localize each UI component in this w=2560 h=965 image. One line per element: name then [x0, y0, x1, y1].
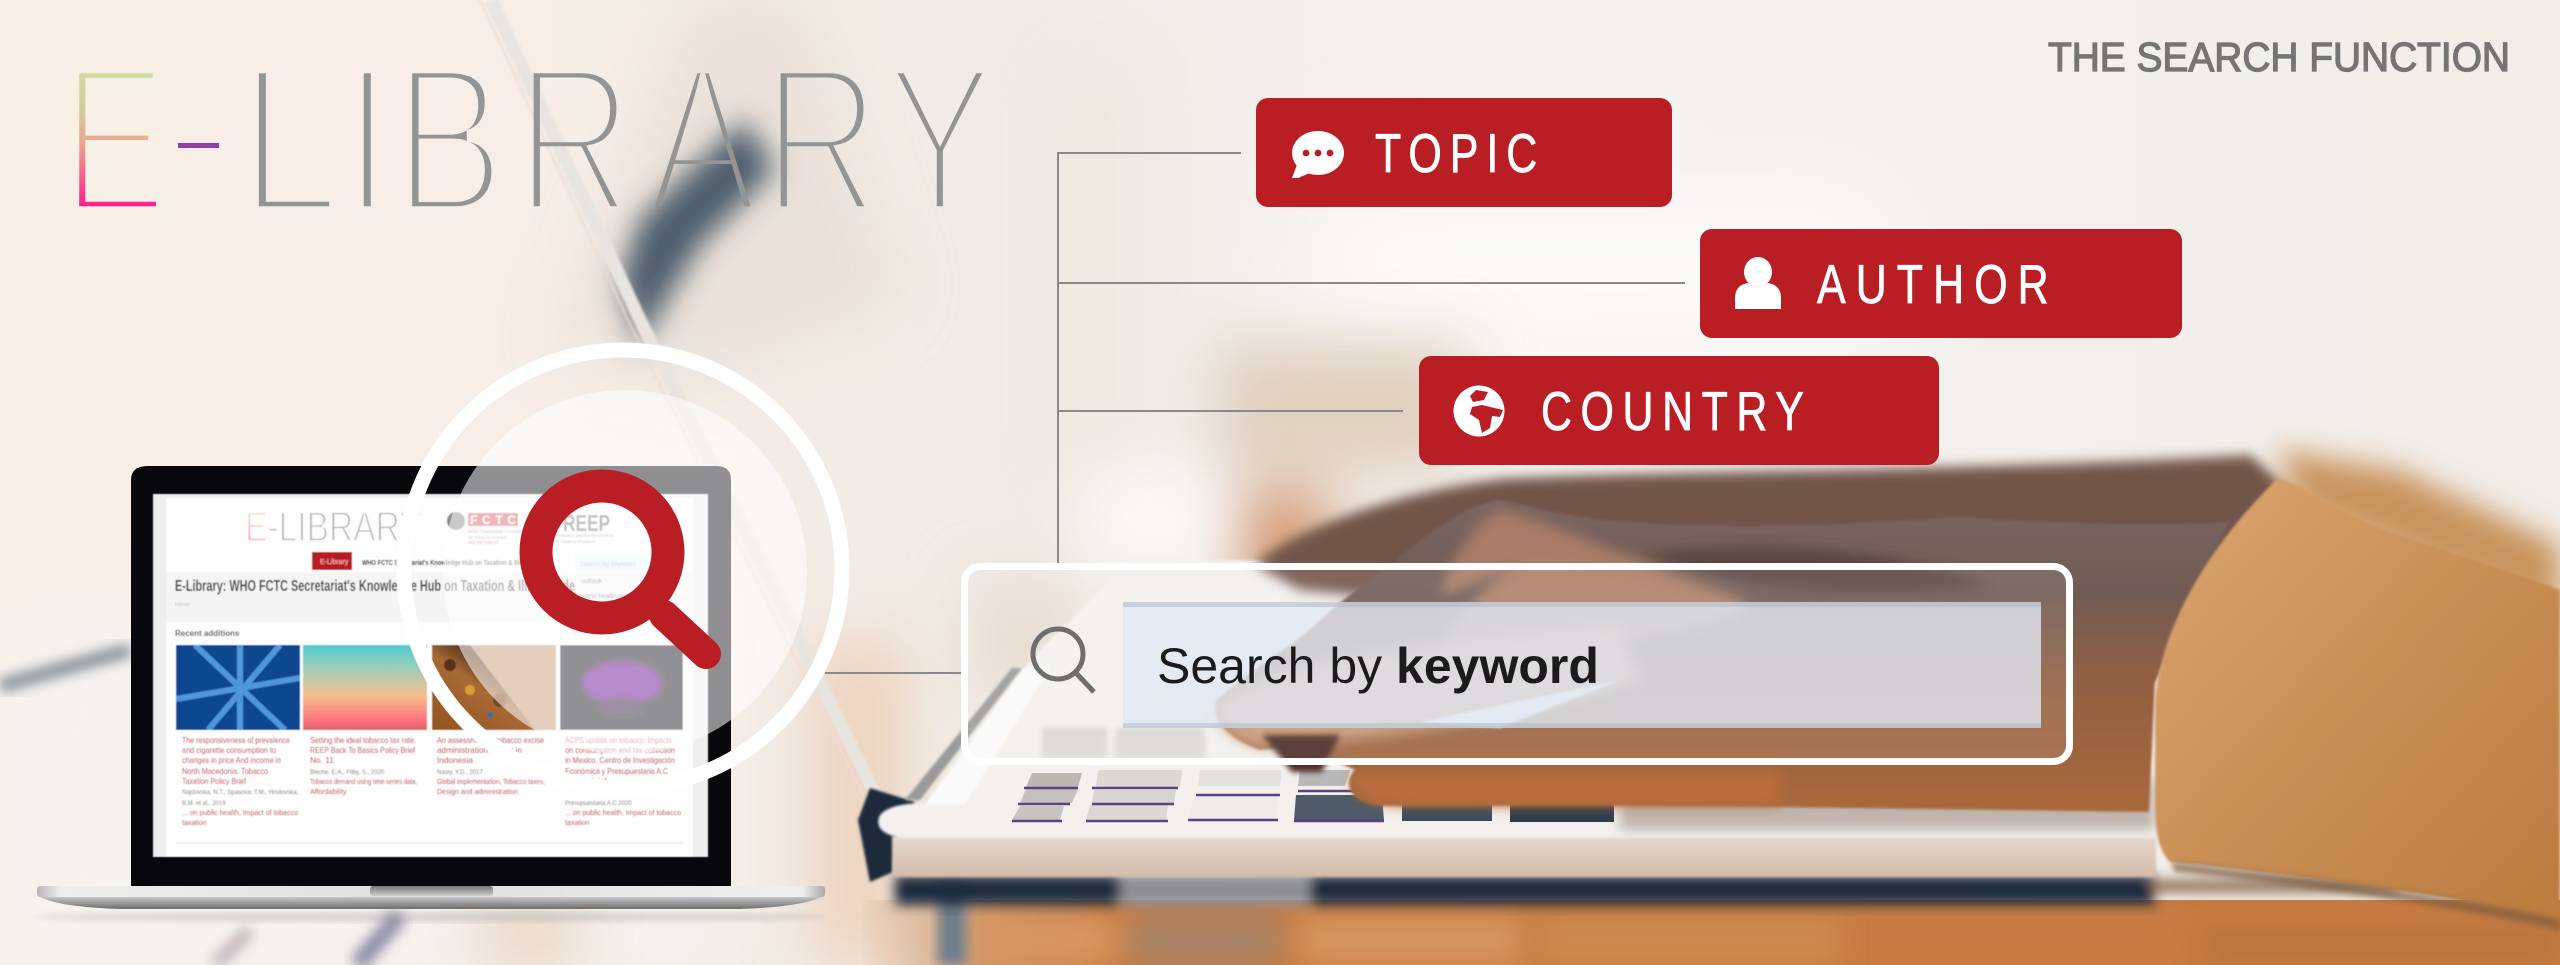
laptop lid edge [491, 0, 878, 800]
icon: chat bubble [1292, 131, 1344, 178]
card 3 text: Indonesia [437, 755, 473, 765]
label: COUNTRY [1541, 381, 1804, 442]
laptop shadow [895, 874, 2400, 906]
card 4 text: taxation [565, 820, 590, 827]
card 1 text: Najdovska, N.T., Spasova, T.M., Hristovska, [182, 790, 299, 796]
card 1 text: changes in price And income in [182, 755, 281, 765]
card image: painting [432, 645, 556, 730]
FCTC logo [447, 512, 527, 545]
card 4 text: ACPS update on tobacco: Impacts [565, 735, 672, 745]
second sleeve behind [2276, 450, 2560, 620]
placeholder text: Search by keyword [1157, 638, 1599, 694]
back hand [1255, 455, 2290, 620]
keyboard keys [1012, 728, 1614, 822]
icon: person [1735, 257, 1781, 309]
page heading: E-Library: WHO FCTC Secretariat's Knowledge Hub on Taxation & Illicit Trade [175, 578, 575, 595]
card 3 text: Global implementation, Tobacco taxes, [437, 779, 545, 786]
card 3 text: Nasty, Y.D., 2017 [437, 770, 483, 776]
title: E-LIBRARY [79, 73, 982, 206]
card 4 text: Económica y Presupuestaria A.C [565, 766, 668, 776]
card 2 text [310, 735, 417, 796]
FCTC logo: on Tobacco Control [468, 535, 507, 540]
card 1 text: North Macedonia. Tobacco [182, 766, 268, 776]
laptop front edge [892, 836, 2156, 877]
heading: THE SEARCH FUNCTION: THE SEARCH FUNCTION [2048, 34, 2510, 80]
screen [153, 494, 708, 857]
navigation [312, 552, 527, 570]
search dropdown: world health organ [580, 593, 635, 600]
letter E (gradient) [79, 73, 156, 206]
site logo [248, 512, 420, 540]
card 4 text: Presupuestaria A.C 2020 [565, 801, 632, 807]
navigation: WHO FCTC Secretariat's Knowledge Hub on Taxation & Illicit [362, 558, 527, 567]
search input field [1123, 602, 2041, 728]
REEP logo: REEP [563, 510, 610, 536]
card 2 text: Tobacco demand using time-series data, [310, 779, 417, 786]
screen: Home [175, 602, 190, 608]
connector lines [825, 153, 1685, 673]
card 1 text: taxation [182, 820, 207, 827]
lower-left streaks [0, 650, 130, 686]
magnifier glass disc [443, 390, 807, 754]
card image: sunset gradient [303, 645, 427, 730]
sweater sleeve [2155, 480, 2560, 930]
card image: architecture [176, 645, 300, 730]
word LIBRARY [258, 73, 982, 206]
card 2 text: REEP Back To Basics Policy Brief [310, 745, 416, 755]
FCTC logo: WHO Framework Convention [468, 529, 527, 534]
card 4 text: Policy Brief [565, 776, 607, 786]
icon: red magnifying glass [536, 486, 706, 654]
card 1 text: and cigarette consumption to [182, 745, 276, 755]
card 1 text [182, 735, 299, 827]
card 4 text: on consumption and tax collection [565, 745, 675, 755]
card 2 text: No. 11 [310, 755, 334, 765]
label: AUTHOR [1817, 254, 2049, 315]
wood table [860, 900, 2560, 965]
label: TOPIC [1375, 123, 1537, 184]
card 2 text: Setting the ideal tobacco tax rate. [310, 735, 416, 745]
blurred diagonal streak [620, 120, 775, 350]
card 2 text: Affordability [310, 789, 347, 796]
laptop base [35, 886, 825, 922]
laptop deck [878, 560, 2155, 838]
REEP logo: Research and the Economics [555, 533, 615, 538]
FCTC logo: SECRETARIAT [468, 540, 499, 545]
card 3 text: An assessment of tobacco excise [437, 735, 544, 745]
search bar [964, 566, 2070, 762]
search dropdown: Search by keyword [580, 561, 636, 568]
FCTC logo: FCTC [470, 513, 516, 527]
button: COUNTRY [1419, 356, 1939, 465]
laptop hinge [858, 788, 915, 882]
card 4 text: ... on public health, Impact of tobacco [565, 810, 681, 817]
front hand [1216, 500, 2228, 812]
navigation: E-Library [320, 559, 349, 566]
card 3 text: administration issues in [437, 745, 522, 755]
screen: Recent additions [175, 629, 240, 638]
card 1 text: B.M. et al., 2019 [182, 801, 226, 807]
finger details [1217, 510, 1990, 806]
REEP logo [555, 510, 615, 544]
icon: globe [1454, 386, 1504, 436]
REEP logo: of Tobacco Products [555, 539, 596, 544]
card 2 text: Bleche, E.A., Filby, S., 2020 [310, 770, 385, 776]
button: TOPIC [1256, 98, 1672, 207]
laptop lid [131, 466, 731, 886]
card 4 text [565, 735, 681, 827]
button: AUTHOR [1700, 229, 2182, 338]
card 1 text: Taxation Policy Brief [182, 776, 247, 786]
icon: magnifier [1033, 629, 1094, 692]
card 1 text: The responsiveness of prevalence [182, 735, 290, 745]
search dropdown: outlook [581, 578, 603, 585]
search dropdown [575, 555, 650, 600]
magnifier outer ring [404, 350, 842, 788]
card 4 text: in Mexico. Centro de Investigación [565, 755, 675, 765]
card image: purple smoke [560, 645, 683, 730]
card 1 text: ... on public health, Impact of tobacco [182, 810, 298, 817]
card 3 text: Design and administration [437, 789, 518, 796]
small laptop mockup [35, 466, 825, 922]
hyphen: - [171, 105, 227, 176]
card 3 text [437, 735, 545, 796]
